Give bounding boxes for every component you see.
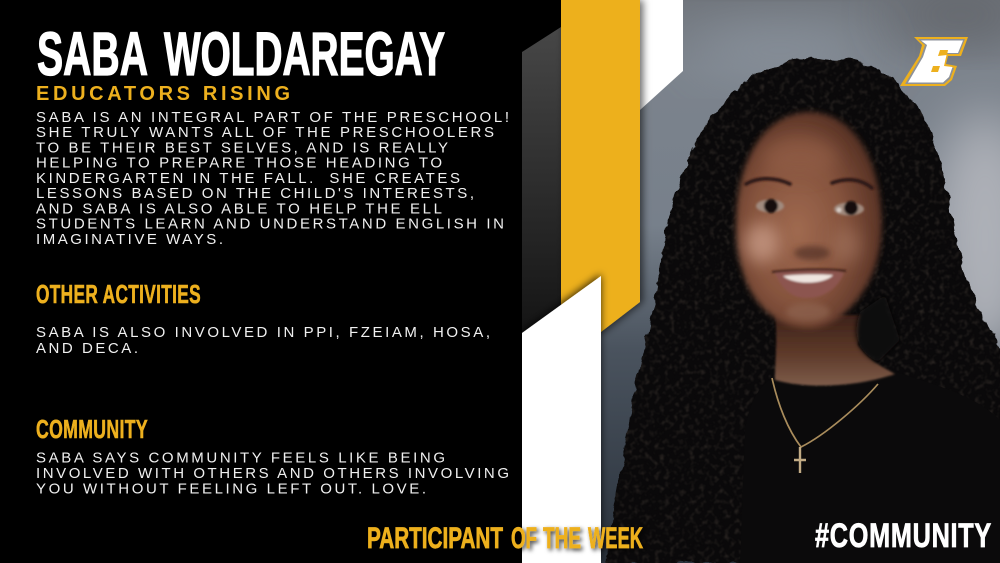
community text	[36, 450, 509, 497]
name heading	[37, 20, 445, 88]
hair	[606, 58, 1000, 563]
community text: INVOLVED WITH OTHERS AND OTHERS INVOLVING	[36, 465, 509, 482]
bio paragraph: SHE TRULY WANTS ALL OF THE PRESCHOOLERS	[36, 124, 494, 141]
bio paragraph: IMAGINATIVE WAYS.	[36, 231, 223, 248]
bio paragraph: STUDENTS LEARN AND UNDERSTAND ENGLISH IN	[36, 216, 504, 232]
forehead highlight	[766, 136, 836, 166]
top white stripe	[640, 0, 683, 110]
neck	[775, 315, 895, 386]
nose	[794, 246, 830, 260]
subheading: educators rising: EDUCATORS RISING	[36, 83, 290, 105]
mouth	[772, 269, 846, 298]
community text: SABA SAYS COMMUNITY FEELS LIKE BEING	[36, 450, 445, 467]
yellow stripe	[561, 0, 640, 332]
gray angled stripe	[522, 27, 561, 334]
bio paragraph: KINDERGARTEN IN THE FALL. SHE CREATES	[36, 170, 460, 187]
eyebrows	[746, 179, 872, 188]
icon: school E logo	[900, 37, 968, 86]
student portrait photo	[600, 0, 1000, 563]
other activities text	[36, 324, 490, 357]
footer: participant of the week: THE	[543, 522, 581, 555]
cheek highlights	[745, 223, 779, 263]
bio paragraph: HELPING TO PREPARE THOSE HEADING TO	[36, 154, 442, 172]
sweater	[740, 372, 1000, 563]
eyes	[756, 199, 864, 216]
hair curls over neck	[857, 295, 900, 362]
bio paragraph: SABA IS AN INTEGRAL PART OF THE PRESCHOOL!	[36, 109, 509, 126]
bio paragraph	[36, 109, 509, 248]
footer: participant of the week: PARTICIPANT	[367, 522, 503, 555]
lower white stripe	[522, 276, 601, 563]
necklace	[772, 378, 878, 473]
bio paragraph: LESSONS BASED ON THE CHILD'S INTERESTS,	[36, 185, 474, 202]
bio paragraph: AND SABA IS ALSO ABLE TO HELP THE ELL	[36, 200, 442, 217]
footer: participant of the week: WEEK	[588, 522, 643, 555]
heading: other activities: OTHER ACTIVITIES	[36, 279, 201, 309]
other activities text: AND DECA.	[36, 340, 138, 357]
community text: YOU WITHOUT FEELING LEFT OUT. LOVE.	[36, 480, 426, 497]
name heading: WOLDAREGAY	[164, 20, 445, 88]
footer: participant of the week: OF	[511, 522, 537, 555]
name heading: SABA	[37, 20, 148, 88]
other activities text: SABA IS ALSO INVOLVED IN PPI, FZEIAM, HOSA,	[36, 324, 490, 341]
face	[736, 112, 882, 328]
heading: community: COMMUNITY	[36, 414, 148, 444]
bio paragraph: TO BE THEIR BEST SELVES, AND IS REALLY	[36, 139, 448, 156]
